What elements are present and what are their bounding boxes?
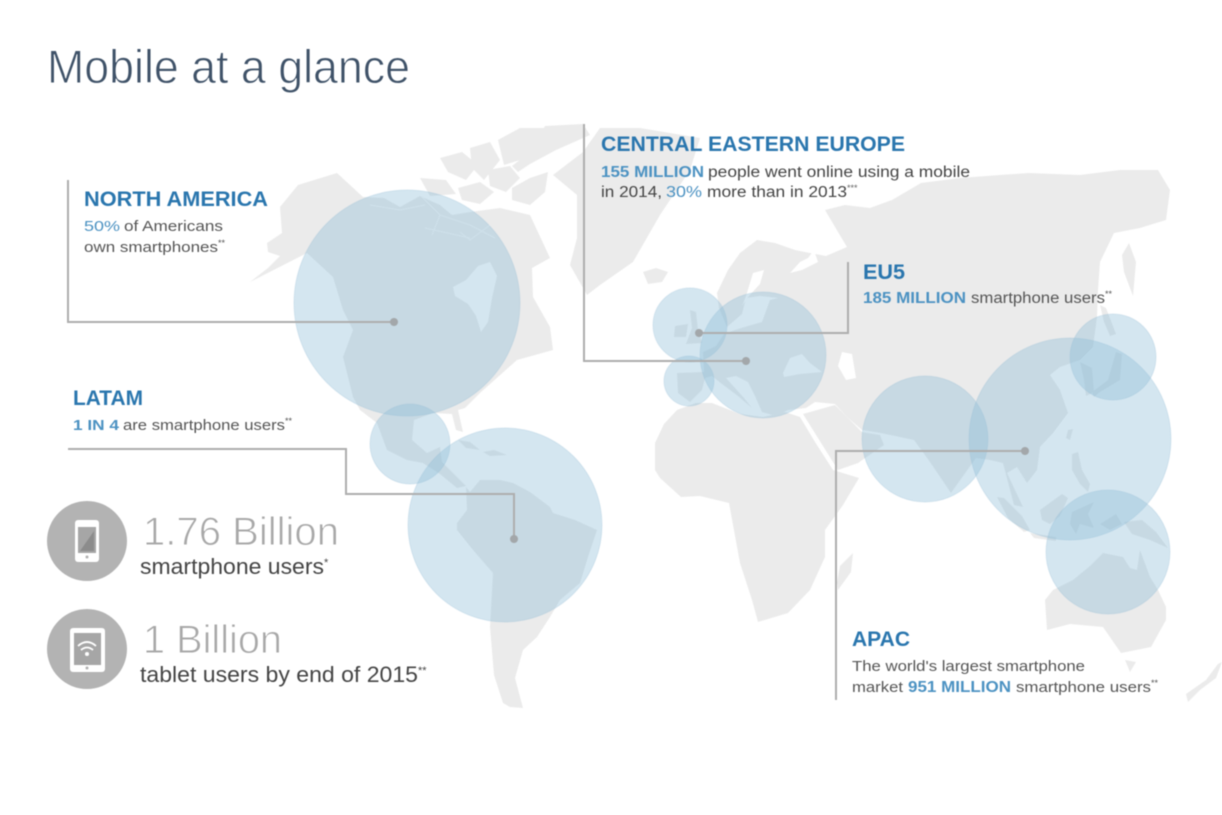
- bubble: China and South East Asia: [969, 338, 1171, 540]
- map: Iceland: [643, 268, 668, 284]
- callout: LATAM: 1 IN 4: [73, 417, 120, 434]
- callout: APAC: APAC: [852, 628, 910, 651]
- callout: LATAM: [73, 387, 293, 434]
- map: Arabia: [803, 405, 884, 470]
- callout: APAC: market: [852, 679, 904, 696]
- bubble: Mexico: [370, 404, 450, 484]
- map: Scandinavia and Eurasia: [677, 170, 1170, 507]
- stat: smartphone users: smartphone users: [140, 554, 324, 579]
- map: Taiwan: [1066, 429, 1073, 440]
- bubble: South America: [408, 428, 602, 622]
- map: White Sea cut-out: [790, 250, 818, 273]
- callout: Central Eastern Europe: 155 MILLION: [601, 164, 704, 181]
- callout: North America: own smartphones: [84, 239, 218, 256]
- callout: APAC: **: [1151, 678, 1159, 688]
- stat: tablet users: [47, 609, 427, 689]
- title: Mobile at a glance: [47, 40, 410, 93]
- map: South America: [457, 480, 597, 708]
- map: Tasmania: [1125, 660, 1136, 672]
- callout: APAC: [852, 628, 1159, 696]
- callout: Central Eastern Europe: [601, 133, 970, 201]
- icon: smartphone: [47, 501, 127, 581]
- stat: tablet users: 1 Billion: [143, 618, 282, 662]
- callout: APAC: The world's largest smartphone: [852, 658, 1085, 675]
- world map: [250, 124, 1222, 708]
- bubble: India: [862, 376, 988, 502]
- map: New Guinea: [1124, 520, 1168, 548]
- map: Africa: [655, 403, 859, 622]
- bubble: Australia and Indonesia: [1046, 490, 1170, 614]
- icon: tablet with wifi: [47, 609, 127, 689]
- map: Cuba and Hispaniola: [458, 440, 507, 456]
- callout: North America: NORTH AMERICA: [84, 188, 268, 211]
- callout: LATAM: are smartphone users: [123, 417, 285, 434]
- map: Korea: [1080, 362, 1094, 396]
- callout: EU5: [863, 261, 1113, 307]
- map: North America: [250, 173, 553, 488]
- callout: EU5: EU5: [863, 261, 905, 284]
- callout: North America: [84, 188, 268, 256]
- map: Caspian Sea cut-out: [838, 352, 856, 380]
- bubble: Central Eastern Europe: [700, 292, 826, 418]
- map: Java and Sulawesi: [1030, 502, 1122, 541]
- leader: Central Eastern Europe: [584, 124, 750, 365]
- map: Sumatra: [997, 497, 1030, 532]
- map: Madagascar: [837, 553, 853, 590]
- callout: Central Eastern Europe: ***: [847, 183, 858, 193]
- callout: EU5: 185 MILLION: [863, 290, 966, 307]
- stat: smartphone users: 1.76 Billion: [143, 510, 339, 554]
- leader: LATAM: [68, 449, 518, 543]
- map: Kamchatka: [1122, 243, 1136, 296]
- map: Baltic and Gulf of Bothnia cut-out: [742, 270, 764, 306]
- callout: Central Eastern Europe: people went online using a mobile: [708, 164, 970, 181]
- leader: APAC: [836, 447, 1029, 700]
- stat: smartphone users: *: [324, 557, 329, 569]
- map: Arctic islands: [420, 124, 590, 205]
- callout: Central Eastern Europe: in 2014,: [601, 184, 662, 201]
- callout: Central Eastern Europe: CENTRAL EASTERN EUROPE: [601, 133, 905, 156]
- map: Hudson Bay cut-out: [453, 262, 497, 332]
- bubble: Japan: [1070, 314, 1156, 400]
- map: New Zealand: [1186, 662, 1222, 702]
- callout: North America: **: [218, 238, 226, 248]
- bubble: UK: [653, 288, 727, 362]
- map: UK and Ireland: [674, 310, 702, 344]
- leader: EU5: [695, 262, 848, 337]
- map: Sakhalin: [1100, 305, 1116, 336]
- stat: tablet users: **: [418, 665, 427, 677]
- stat: smartphone users: [47, 501, 339, 581]
- callout: Central Eastern Europe: 30%: [666, 184, 702, 201]
- map: Philippines: [1072, 452, 1090, 492]
- callout: LATAM: LATAM: [73, 387, 143, 410]
- callout: EU5: **: [1105, 289, 1113, 299]
- callout: EU5: smartphone users: [971, 290, 1105, 307]
- bubble: Iberia: [664, 356, 714, 406]
- leader: North America: [68, 180, 398, 326]
- callout: LATAM: **: [285, 416, 293, 426]
- callout: Central Eastern Europe: more than in 2013: [707, 184, 847, 201]
- callout: APAC: 951 MILLION: [908, 679, 1011, 696]
- stat: tablet users: tablet users by end of 2015: [140, 662, 418, 687]
- map: Japan: [1092, 352, 1122, 397]
- map: Australia: [1045, 550, 1166, 653]
- bubble: North America: [294, 190, 520, 416]
- map: Greenland: [553, 128, 700, 295]
- callout: North America: of Americans: [124, 218, 223, 235]
- callout: North America: 50%: [84, 218, 120, 235]
- map: Black Sea cut-out: [783, 354, 822, 377]
- map: Borneo: [1040, 494, 1068, 524]
- callout: APAC: smartphone users: [1016, 679, 1151, 696]
- region bubbles: [294, 190, 1171, 622]
- map: arctic channels: [370, 195, 495, 240]
